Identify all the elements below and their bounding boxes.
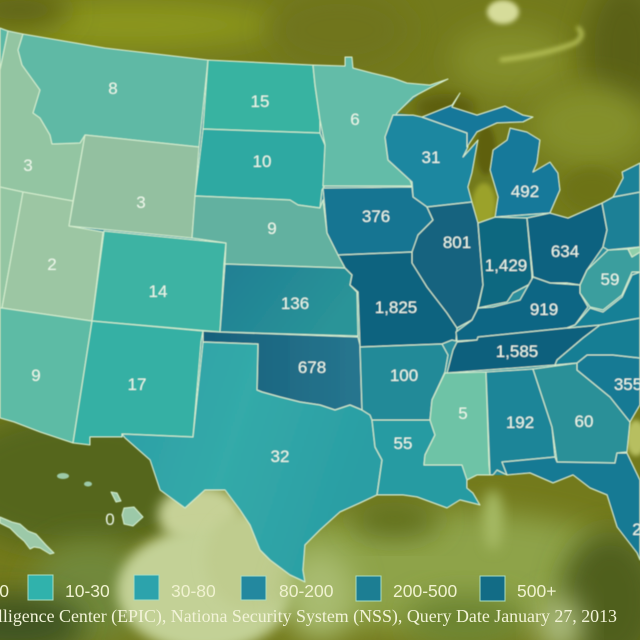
state: Utah: 2 [47,255,57,274]
state: Missouri: 1,825 [375,298,417,317]
state: South Dakota [195,129,325,208]
state: Idaho [0,31,85,201]
state: New Mexico: 17 [128,375,146,394]
state: Indiana [478,217,532,308]
legend item: 10-30: 10-30 [65,581,110,601]
state: Michigan upper peninsula [422,93,533,147]
legend item: 500+: 500+ [517,581,556,601]
state: Nebraska [192,196,345,268]
state: Nebraska: 9 [267,219,277,238]
state: Hawaii [57,473,143,529]
state: North Carolina [555,318,640,365]
legend [0,575,556,601]
legend item: 10-30 [28,575,110,601]
state: Illinois: 801 [443,233,471,252]
legend item: 30-80: 30-80 [171,581,216,601]
state: Oklahoma: 678 [298,358,326,377]
state: Montana: 8 [108,79,118,98]
state: Tennessee [447,325,600,373]
state: Arizona: 9 [31,366,41,385]
state: North Dakota: 15 [251,92,269,111]
state: Pennsylvania [602,192,640,250]
state: Texas: 32 [271,447,289,466]
state: Arkansas: 100 [390,366,418,385]
legend item: 200-500: 200-500 [393,581,457,601]
state: North Dakota [203,60,320,133]
state: Michigan lower peninsula [490,128,560,217]
state: Mississippi [424,372,490,480]
state: Alaska [0,517,54,554]
legend item: 80-200: 80-200 [279,581,334,601]
state: Louisiana: 55 [394,434,412,453]
state: Wyoming [69,135,199,238]
state: Missouri [338,252,457,347]
state: Tennessee: 1,585 [496,342,538,361]
state: Alabama [486,369,555,475]
state: West Virginia [580,249,640,310]
state: New York [613,163,640,197]
state: South Carolina [577,355,640,422]
state: New Mexico [73,321,203,445]
state: Idaho: 3 [23,156,33,175]
state: Michigan lower peninsula: 492 [511,182,539,201]
state: Ohio: 634 [551,242,579,261]
legend item: 200-500 [356,576,457,601]
state: Alabama: 192 [506,413,534,432]
state: Oklahoma [203,331,362,410]
state: Wisconsin [385,115,478,207]
state: Maryland [628,247,640,257]
state: Virginia [567,272,640,328]
state: Hawaii: 0 [105,510,115,529]
state: Kansas [220,264,358,336]
state: Kentucky: 919 [530,300,558,319]
state: Minnesota: 6 [350,110,360,129]
state: Illinois [412,202,483,328]
state: Wyoming: 3 [136,193,146,212]
state: Iowa [323,187,433,255]
state: Mississippi: 5 [458,404,468,423]
legend item: 30-80 [134,575,216,601]
state: Arkansas [360,344,448,420]
state: Louisiana [372,420,480,508]
state: Washington [0,28,8,70]
state: Arizona [0,308,92,443]
state: West Virginia: 59 [601,270,619,289]
state: Colorado: 14 [149,282,167,301]
legend item: 500+ [480,576,556,601]
state: Kansas: 136 [281,294,309,313]
state: Indiana: 1,429 [485,256,527,275]
state: Montana [18,34,208,147]
state: Ohio [527,203,607,285]
state: Florida [502,453,640,560]
state: Iowa: 376 [362,207,390,226]
state: Texas [122,342,382,582]
state: Kentucky [456,277,588,341]
state: Minnesota [313,57,448,186]
legend item: 80-200 [241,576,334,601]
state: Georgia: 60 [575,412,593,431]
state: Utah [2,192,103,321]
state: Georgia [533,363,630,463]
state: Wisconsin: 31 [422,148,440,167]
state: Nevada [0,187,23,308]
state: South Dakota: 10 [253,152,271,171]
state: Colorado [92,231,226,332]
